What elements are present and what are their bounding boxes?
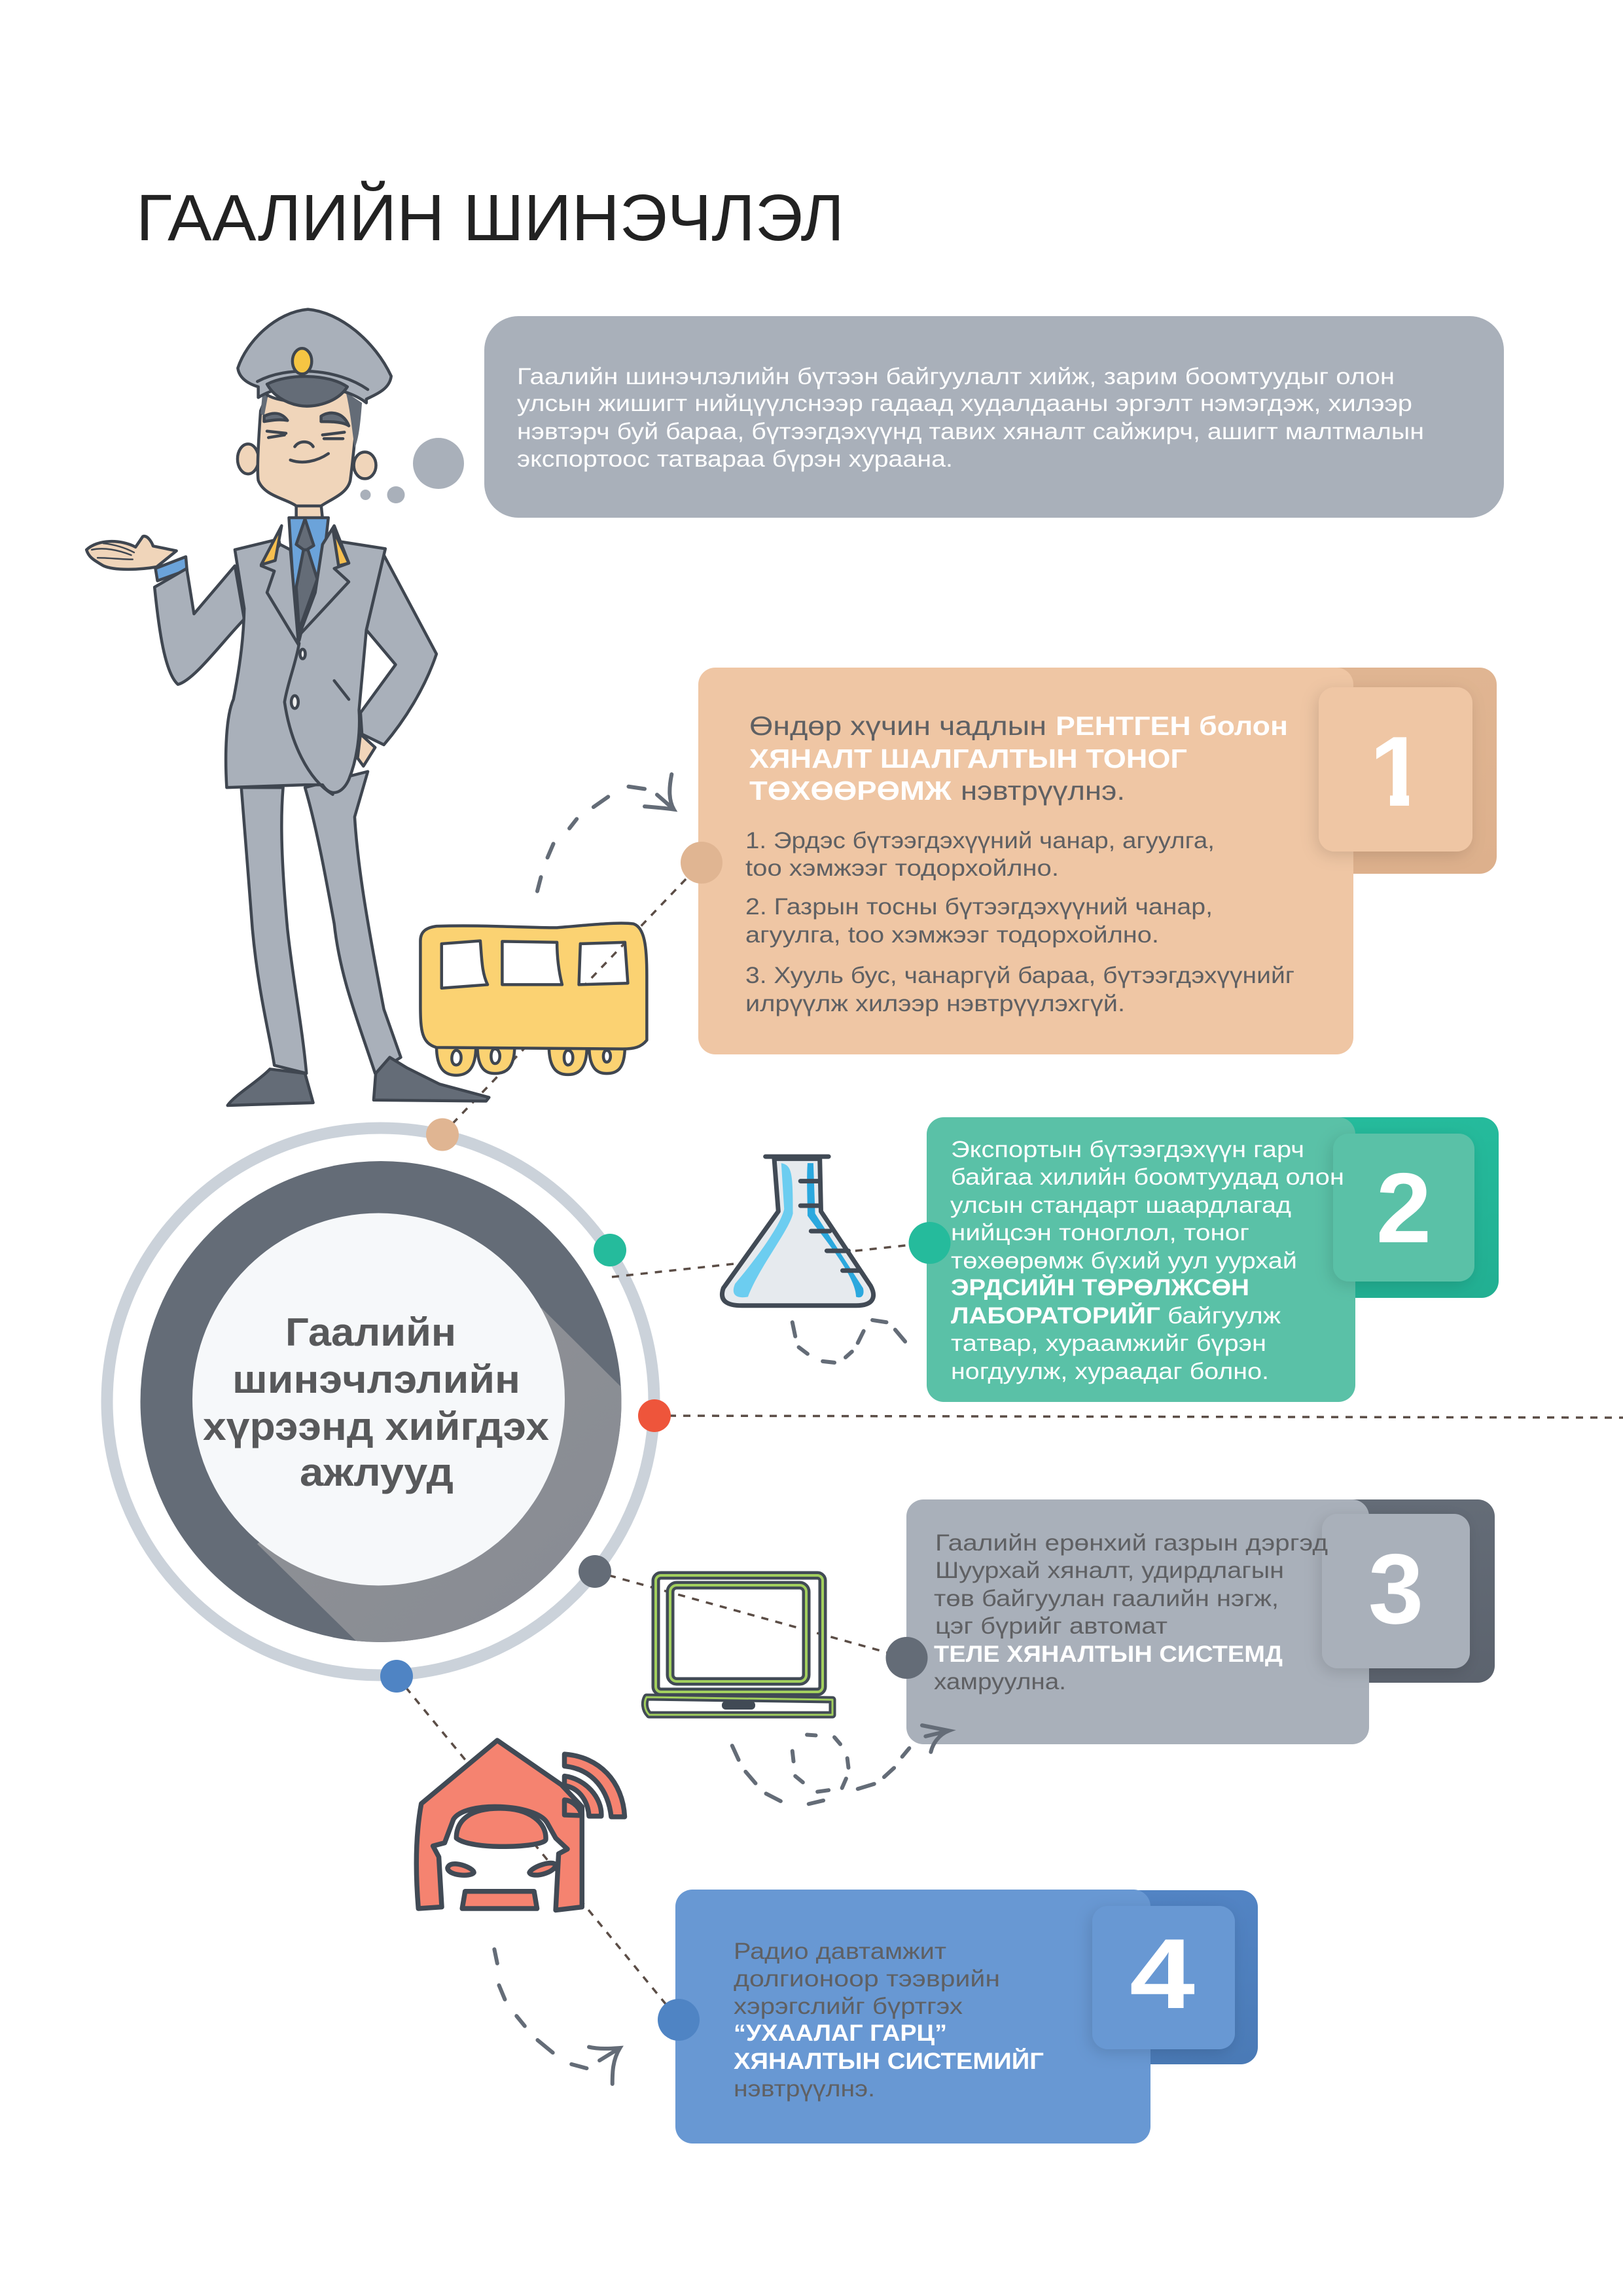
card 2 text: Экспортын бүтээгдэхүүн гарч (951, 1137, 1304, 1162)
intro text (517, 364, 1424, 472)
card 2 text: нийцсэн тоноглол, тоног (951, 1220, 1249, 1246)
connector dot 4 (658, 1999, 700, 2041)
card 1 list: 2. Газрын тосны бүтээгдэхүүний чанар, (745, 894, 1213, 920)
center heading: хүрээнд хийгдэх (203, 1405, 549, 1448)
card 2 text: ногдуулж, хураадаг болно. (951, 1359, 1269, 1384)
panel: intro speech card (484, 316, 1504, 518)
card 1 list: too хэмжээг тодорхойлно. (745, 855, 1059, 881)
arrowhead over card 3 (922, 1725, 949, 1752)
card 1 list (745, 828, 1294, 1016)
panel: card 4 (658, 1890, 1258, 2144)
card 2 text: төхөөрөмж бүхий уул уурхай (951, 1248, 1297, 1274)
card 3 text: ТЕЛЕ ХЯНАЛТЫН СИСТЕМД (934, 1641, 1283, 1667)
panel: card 2 (908, 1117, 1499, 1402)
panel: card 1 (681, 668, 1497, 1054)
card 3 text: цэг бүрийг автомат (935, 1613, 1168, 1639)
connector: red dot to page edge (654, 1416, 1623, 1418)
arrow: dashed curve to card 4 (494, 1949, 620, 2084)
timeline dots on ring (380, 1118, 671, 1693)
card 1 heading: РЕНТГЕН болон (1056, 711, 1288, 741)
arrow: looping dashed curve to card 3 (732, 1734, 909, 1804)
connector dot 3 (886, 1637, 928, 1679)
connector: green dot to card 2 (612, 1243, 929, 1277)
card 3 text: хамруулна. (934, 1669, 1066, 1695)
panel: card 3 (886, 1499, 1495, 1752)
arrow: dashed curve to card 1 (537, 774, 674, 891)
intro text: улсын жишигт нийцүүлснээр гадаад худалдааны эргэлт нэмэгдэж, хилээр (517, 391, 1412, 416)
thought bubbles (360, 438, 464, 503)
card 4 text: ХЯНАЛТЫН СИСТЕМИЙГ (734, 2048, 1044, 2074)
card 2 text (950, 1137, 1344, 1384)
card 2 text: ЛАБОРАТОРИЙГ (951, 1302, 1160, 1329)
arrow: dashed curve under flask (793, 1320, 905, 1363)
card 1 list: илрүүлж хилээр нэвтрүүлэхгүй. (745, 991, 1125, 1016)
number 4: 4 (1130, 1918, 1195, 2030)
card 1 list: агуулга, too хэмжээг тодорхойлно. (745, 922, 1159, 948)
icon: yellow bus (420, 924, 647, 1075)
center heading: Гаалийн (285, 1310, 456, 1354)
center heading: шинэчлэлийн (232, 1357, 520, 1401)
center heading (203, 1310, 549, 1494)
icon: laptop (645, 1575, 832, 1715)
central circle diagram (107, 1128, 654, 1702)
card 3 text: төв байгуулан гаалийн нэгж, (934, 1586, 1279, 1611)
intro text: нэвтэрч буй бараа, бүтээгдэхүүнд тавих хяналт сайжирч, ашигт малтмалын (517, 419, 1424, 444)
card 4 text: “УХААЛАГ ГАРЦ” (734, 2020, 947, 2046)
icon: smart gate house (416, 1740, 624, 1910)
icon: lab flask (722, 1157, 874, 1306)
card 1 heading: нэвтрүүлнэ. (961, 776, 1125, 806)
card 2 text: ЭРДСИЙН ТӨРӨЛЖСӨН (951, 1274, 1249, 1300)
title: ГААЛИЙН ШИНЭЧЛЭЛ (136, 181, 844, 255)
card 4 text: Радио давтамжит (734, 1939, 946, 1964)
card 4 text (734, 1939, 1044, 2102)
center heading: ажлууд (300, 1450, 454, 1494)
card 1 list: 3. Хууль бус, чанаргүй бараа, бүтээгдэхүүнийг (745, 963, 1294, 988)
illustration: customs officer (86, 310, 489, 1105)
card 4 text: долгионоор тээврийн (734, 1966, 1000, 1992)
long shadow (257, 1308, 622, 1642)
card 3 text (934, 1530, 1328, 1695)
card 1 heading (749, 711, 1288, 806)
connector: grey dot to card 3 (595, 1571, 906, 1658)
card 3 text: Гаалийн ерөнхий газрын дэргэд (935, 1530, 1328, 1556)
card 1 heading: Өндөр хүчин чадлын (749, 711, 1046, 741)
card 1 heading: ХЯНАЛТ ШАЛГАЛТЫН ТОНОГ (749, 744, 1187, 774)
card 2 text: татвар, хураамжийг бүрэн (951, 1331, 1266, 1356)
intro text: Гаалийн шинэчлэлийн бүтээн байгуулалт хийж, зарим боомтуудыг олон (517, 364, 1395, 389)
card 1 heading: ТӨХӨӨРӨМЖ (749, 776, 952, 806)
number 1: 1 (1370, 716, 1425, 827)
inner disc (192, 1213, 565, 1585)
outer ring (107, 1128, 654, 1676)
card 2 text: байгуулж (1168, 1303, 1281, 1329)
dark ring (140, 1161, 622, 1642)
card 1 list: 1. Эрдэс бүтээгдэхүүний чанар, агуулга, (745, 828, 1215, 853)
card 4 text: хэрэгслийг бүртгэх (734, 1994, 963, 2019)
number 3: 3 (1368, 1534, 1423, 1645)
card 3 text: Шуурхай хяналт, удирдлагын (935, 1558, 1284, 1583)
card 2 text: улсын стандарт шаардлагад (950, 1193, 1291, 1218)
number 2: 2 (1376, 1153, 1431, 1264)
intro text: экспортоос татвараа бүрэн хураана. (517, 446, 953, 472)
connector: tan dot to card 1 (442, 863, 702, 1134)
card 2 text: байгаа хилийн боомтуудад олон (951, 1164, 1344, 1190)
connector dot 1 (681, 842, 722, 884)
connector: blue dot to card 4 (397, 1676, 679, 2020)
card 4 text: нэвтрүүлнэ. (734, 2076, 875, 2102)
connector dot 2 (908, 1222, 950, 1264)
